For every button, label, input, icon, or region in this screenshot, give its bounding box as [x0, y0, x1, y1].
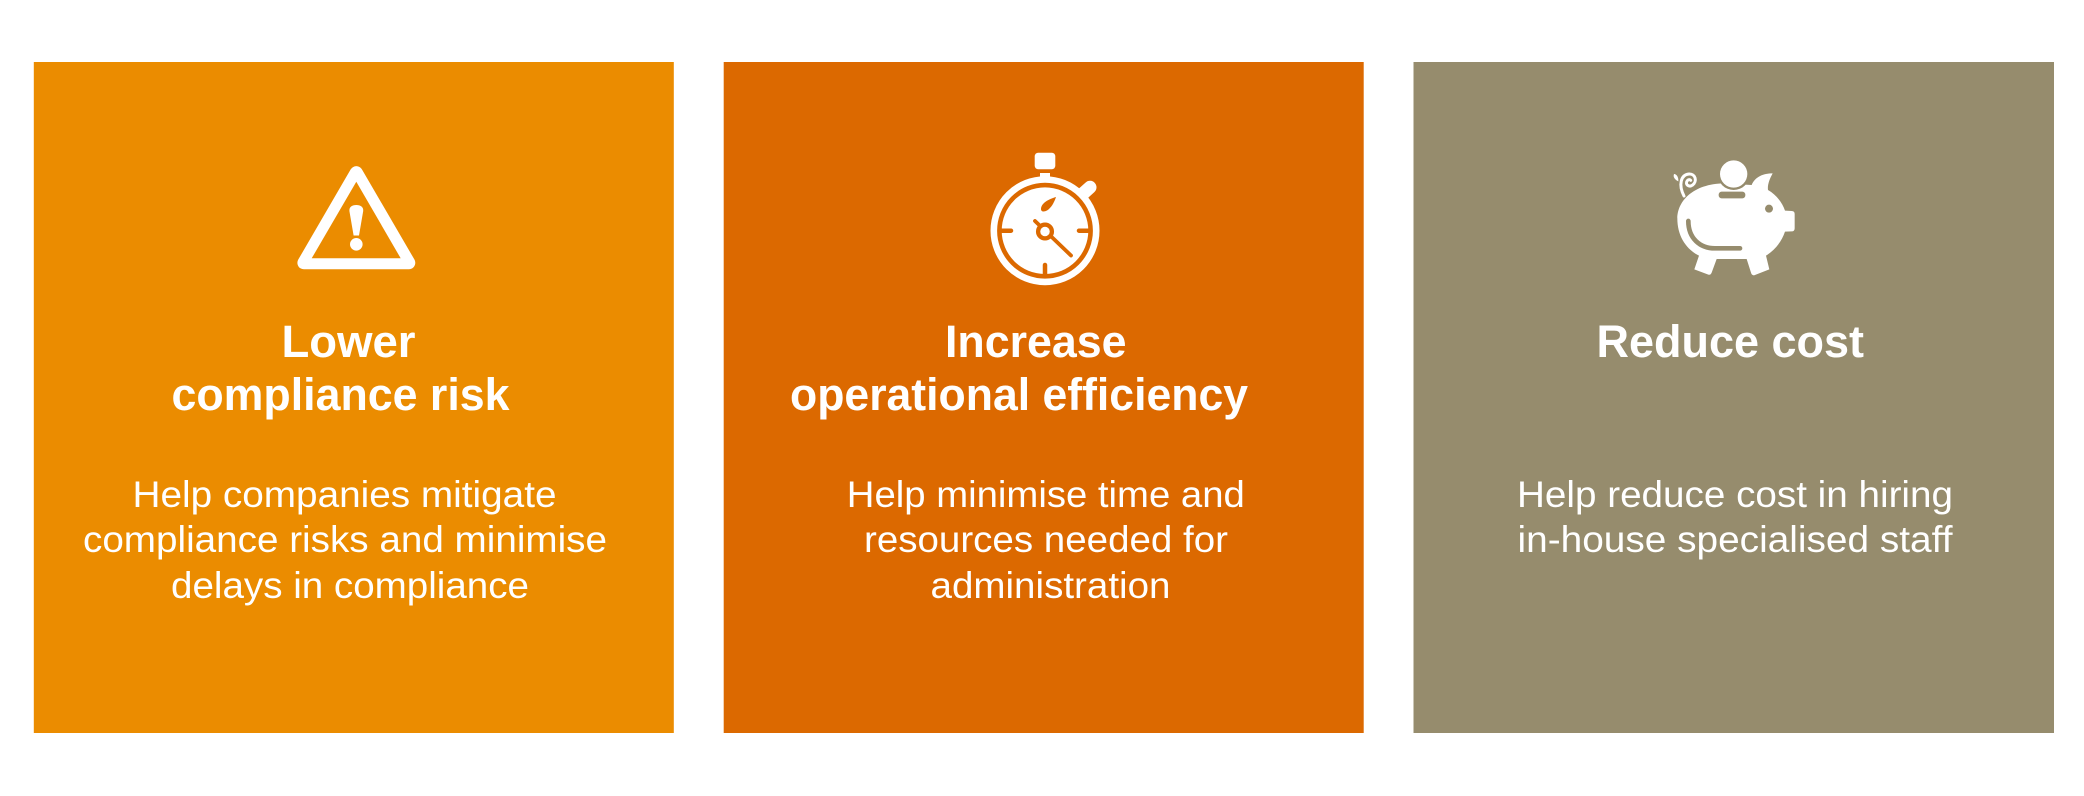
panel: lower compliance risk — [34, 62, 674, 733]
heading: lower compliance risk: compliance risk — [172, 369, 510, 420]
heading: lower compliance risk — [172, 316, 510, 420]
text: lower compliance risk description: delays in compliance — [171, 565, 529, 606]
text: operational efficiency description: administration — [930, 565, 1170, 606]
text: lower compliance risk description — [83, 474, 607, 606]
heading: increase operational efficiency — [790, 316, 1248, 420]
text: operational efficiency description: Help minimise time and — [847, 474, 1245, 515]
panel: increase operational efficiency — [724, 62, 1364, 733]
text: reduce cost description — [1517, 474, 1953, 560]
icon: piggy bank — [1674, 158, 1795, 275]
heading: lower compliance risk: Lower — [282, 316, 416, 367]
heading: increase operational efficiency: Increase — [945, 316, 1126, 367]
text: lower compliance risk description: Help companies mitigate — [132, 474, 556, 515]
icon: warning triangle — [304, 173, 409, 263]
icon: stopwatch — [994, 153, 1096, 282]
panel: reduce cost — [1414, 62, 2054, 733]
text: reduce cost description: in-house specialised staff — [1518, 519, 1953, 560]
text: operational efficiency description: resources needed for — [864, 519, 1228, 560]
text: lower compliance risk description: compliance risks and minimise — [83, 519, 607, 560]
text: operational efficiency description — [847, 474, 1245, 606]
heading: increase operational efficiency: operational efficiency — [790, 369, 1248, 420]
text: reduce cost description: Help reduce cost in hiring — [1517, 474, 1953, 515]
heading: reduce cost: Reduce cost — [1596, 316, 1864, 367]
